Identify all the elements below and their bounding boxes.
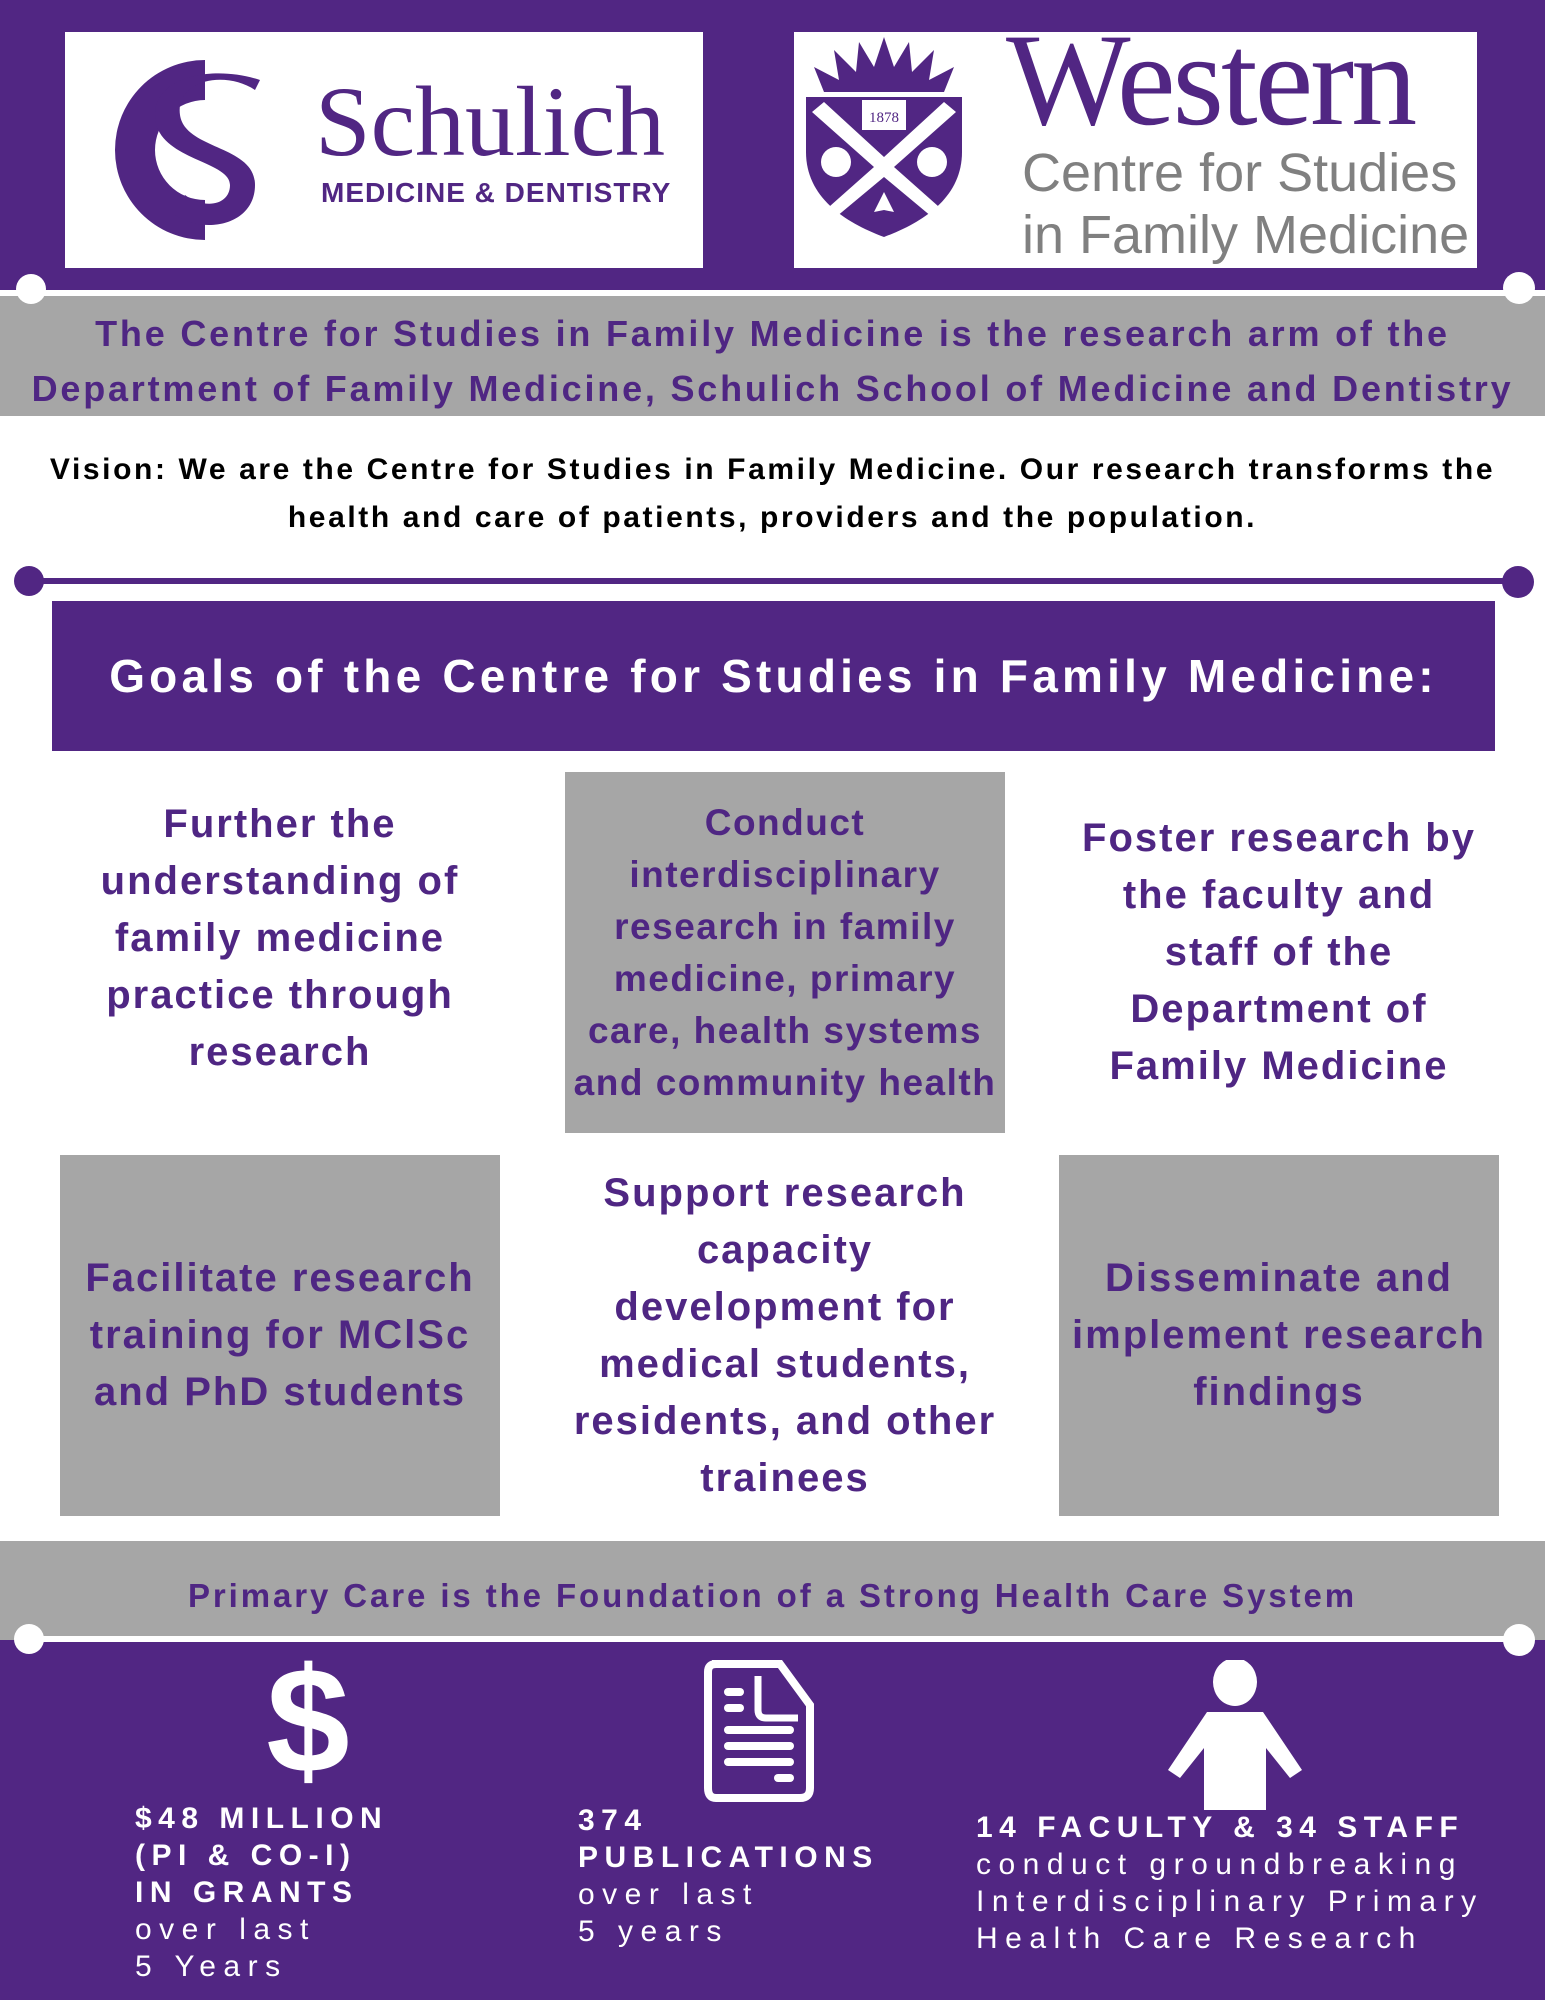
intro band: Department of Family Medicine, Schulich School of Medicine and Dentistry: [32, 368, 1513, 409]
goal 1: understanding of: [101, 859, 459, 903]
goal 5: medical students,: [599, 1342, 971, 1386]
stat: faculty: conduct groundbreaking: [976, 1848, 1463, 1881]
goal 4: Facilitate research: [85, 1256, 475, 1300]
goal 2: research in family: [614, 906, 956, 946]
stat: faculty: [976, 1811, 1484, 1955]
goal 1: Further the: [163, 802, 397, 846]
stat: publications: 5 years: [578, 1915, 729, 1948]
goal 5: Support research: [603, 1170, 967, 1214]
stat: grants: 5 Years: [135, 1950, 288, 1983]
logo: Schulich: [65, 32, 703, 268]
icon: person: [1168, 1660, 1302, 1810]
goal 4: and PhD students: [94, 1370, 466, 1414]
foundation band: [0, 1541, 1545, 1640]
goal 6: Disseminate and: [1105, 1256, 1453, 1300]
icon: dollar: $: [266, 1636, 350, 1804]
goal 4: training for MClSc: [90, 1313, 470, 1357]
goal 4: [60, 1155, 500, 1516]
goal 5: development for: [614, 1284, 956, 1328]
goal 1: practice through: [106, 973, 454, 1017]
goal 2: [565, 772, 1005, 1133]
goal 6: [1059, 1155, 1499, 1516]
goal 2: and community health: [574, 1062, 996, 1102]
goal 5: capacity: [697, 1228, 873, 1272]
stat: publications: over last: [578, 1878, 759, 1911]
stat: publications: 374: [578, 1804, 648, 1837]
stat: grants: [135, 1802, 388, 1983]
goal 6: findings: [1193, 1370, 1365, 1414]
goal 2: medicine, primary: [614, 958, 956, 998]
goal 3: Department of: [1130, 987, 1428, 1031]
stat: publications: [578, 1804, 879, 1948]
stat: grants: $48 MILLION: [135, 1802, 388, 1835]
goal 5: [574, 1170, 996, 1500]
intro band: The Centre for Studies in Family Medicine is the research arm of the: [95, 313, 1450, 354]
logo: Western: in Family Medicine: [1022, 205, 1469, 265]
intro band: [0, 291, 1545, 416]
stat: faculty: Interdisciplinary Primary: [976, 1885, 1484, 1918]
goal 6: implement research: [1072, 1313, 1486, 1357]
stat: faculty: 14 FACULTY & 34 STAFF: [976, 1811, 1464, 1844]
logo: Western: Centre for Studies: [1022, 143, 1457, 203]
logo: Schulich: Schulich: [315, 66, 665, 177]
stat: grants: (PI & CO-I): [135, 1839, 356, 1872]
goals heading: Goals of the Centre for Studies in Family Medicine:: [109, 650, 1438, 702]
goal 5: trainees: [700, 1456, 870, 1500]
goals heading: [52, 601, 1495, 751]
vision text: Vision: We are the Centre for Studies in Family Medicine. Our research transforms the: [50, 453, 1495, 486]
vision text: [50, 453, 1495, 534]
header band: [0, 0, 1545, 290]
logo: Western: 1878: [869, 110, 899, 126]
goal 2: Conduct: [705, 802, 865, 842]
goal 5: residents, and other: [574, 1398, 996, 1442]
goal 3: Foster research by: [1082, 816, 1476, 860]
stat: grants: IN GRANTS: [135, 1876, 358, 1909]
goal 3: [1082, 816, 1476, 1088]
stat: grants: over last: [135, 1913, 316, 1946]
foundation band: Primary Care is the Foundation of a Strong Health Care System: [188, 1577, 1357, 1614]
icon: document: [704, 1660, 814, 1802]
goal 3: the faculty and: [1123, 873, 1435, 917]
goal 2: interdisciplinary: [629, 854, 941, 894]
stat: publications: PUBLICATIONS: [578, 1841, 879, 1874]
logo: Western: [794, 32, 1477, 268]
goal 1: research: [189, 1030, 371, 1074]
goal 3: staff of the: [1165, 930, 1393, 974]
goal 3: Family Medicine: [1110, 1044, 1448, 1088]
divider line with dots: [14, 566, 1534, 598]
logo: Western: Western: [1006, 6, 1414, 153]
vision text: health and care of patients, providers and the population.: [288, 501, 1257, 534]
stats panel: [0, 1640, 1545, 2000]
goal 2: care, health systems: [588, 1010, 982, 1050]
goal 1: [101, 802, 459, 1074]
stat: faculty: Health Care Research: [976, 1922, 1423, 1955]
logo: Schulich: MEDICINE & DENTISTRY: [321, 177, 671, 208]
goal 1: family medicine: [115, 916, 445, 960]
